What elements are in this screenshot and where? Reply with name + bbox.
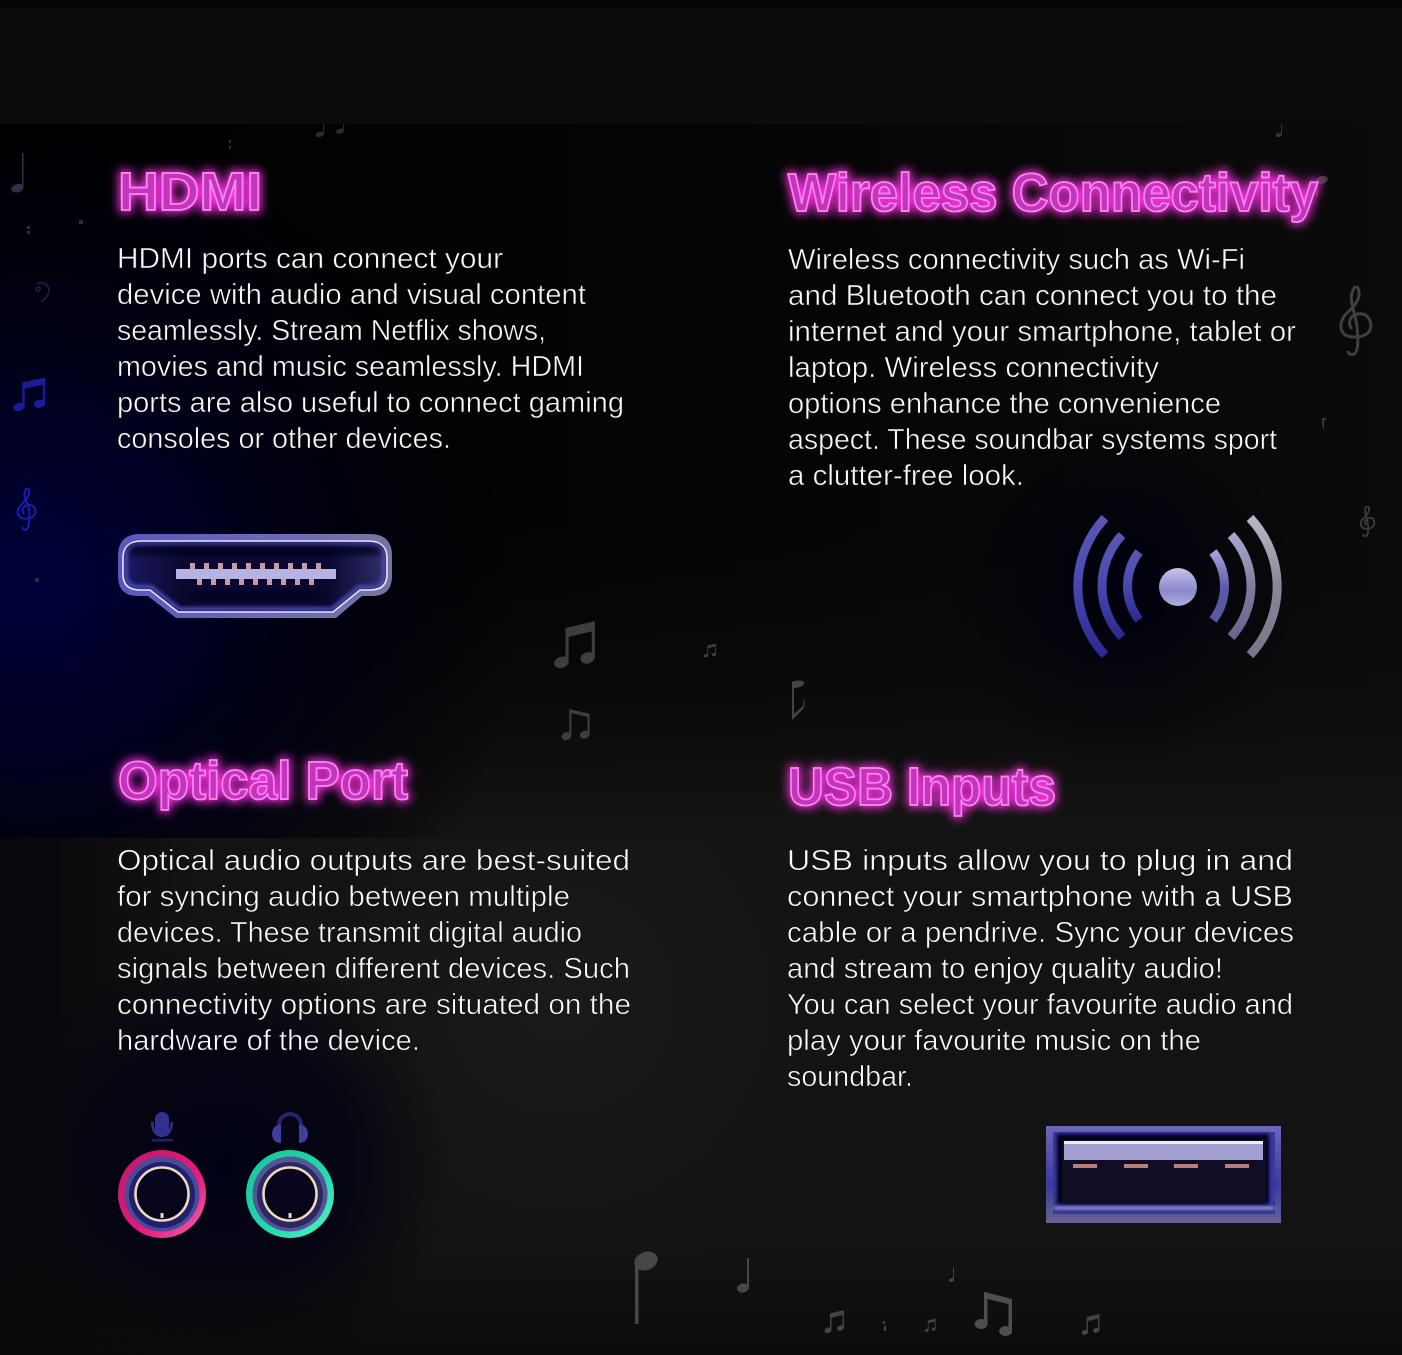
note: center flag	[792, 680, 805, 720]
text: Wireless description: options enhance the convenience	[788, 388, 1221, 420]
heading: Optical Port: Optical Port	[118, 751, 408, 811]
heading: Wireless Connectivity: Wireless Connectivity	[788, 163, 1318, 223]
note: blue beamed	[13, 378, 45, 411]
note: bottom big	[632, 1248, 660, 1324]
text: Optical description: signals between different devices. Such	[117, 953, 630, 985]
text: USB description	[787, 845, 1294, 1093]
note: center beamed medium	[562, 709, 590, 740]
heading: Wireless Connectivity: Wireless Connectivity	[788, 163, 1318, 223]
heading: Optical Port: Optical Port	[118, 751, 408, 811]
heading: HDMI: HDMI	[118, 162, 262, 222]
note: blue treble clef	[18, 488, 36, 530]
heading: USB Inputs: USB Inputs	[788, 757, 1056, 817]
text: USB description: cable or a pendrive. Sync your devices	[787, 917, 1294, 949]
note: bass clef	[36, 283, 49, 302]
icon: headphones	[272, 1114, 308, 1143]
text: Wireless description: internet and your smartphone, tablet or	[788, 316, 1296, 348]
note: bottom beamed set	[825, 1267, 1099, 1336]
text: Wireless description: laptop. Wireless connectivity	[788, 352, 1160, 384]
text: HDMI description: ports are also useful to connect gaming	[117, 387, 624, 419]
text: Optical description: connectivity options are situated on the	[117, 989, 631, 1021]
icon: pink audio jack	[118, 1150, 206, 1238]
heading: USB Inputs: USB Inputs	[788, 757, 1056, 817]
text: HDMI description: seamlessly. Stream Netflix shows,	[117, 315, 546, 347]
text: HDMI description	[117, 243, 624, 455]
text: USB description: and stream to enjoy quality audio!	[787, 953, 1223, 985]
note: right treble clef large	[1341, 286, 1371, 355]
note: quarter top left	[11, 153, 24, 192]
note: center beamed tiny	[704, 644, 716, 657]
text: Optical description: for syncing audio between multiple	[117, 881, 570, 913]
note: top right	[1276, 124, 1282, 137]
panel: HDMI	[117, 162, 624, 618]
text: Optical description: hardware of the device.	[117, 1025, 420, 1057]
note: right treble clef small	[1361, 506, 1374, 536]
note: small dots	[27, 140, 231, 582]
text: USB description: USB inputs allow you to plug in and	[787, 845, 1293, 877]
heading: HDMI: HDMI	[118, 162, 262, 222]
panel: Optical Port	[117, 751, 631, 1238]
text: USB description: play your favourite music on the	[787, 1025, 1201, 1057]
icon: HDMI port	[118, 534, 392, 618]
text: Wireless description: and Bluetooth can connect you to the	[788, 280, 1277, 312]
text: Optical description	[117, 845, 631, 1057]
note: bottom quarter	[736, 1258, 750, 1294]
icon: wireless signal	[1078, 518, 1277, 655]
icon: green audio jack	[246, 1150, 334, 1238]
text: Wireless description: a clutter-free look.	[788, 460, 1024, 492]
text: USB description: soundbar.	[787, 1061, 913, 1093]
text: Optical description: devices. These transmit digital audio	[117, 917, 582, 949]
note: center beamed large	[554, 621, 595, 668]
text: USB description: You can select your favourite audio and	[787, 989, 1293, 1021]
text: HDMI description: consoles or other devices.	[117, 423, 451, 455]
text: Wireless description: aspect. These soundbar systems sport	[788, 424, 1277, 456]
text: USB description: connect your smartphone with a USB	[787, 881, 1293, 913]
icon: USB port	[1046, 1126, 1281, 1223]
icon: microphone	[151, 1112, 173, 1142]
text: HDMI description: HDMI ports can connect your	[117, 243, 503, 275]
text: HDMI description: movies and music seamlessly. HDMI	[117, 351, 584, 383]
text: Wireless description: Wireless connectivity such as Wi-Fi	[788, 244, 1245, 276]
note: top pair	[316, 124, 344, 137]
panel: Wireless Connectivity	[788, 163, 1318, 655]
text: Optical description: Optical audio outputs are best-suited	[117, 845, 630, 877]
text: HDMI description: device with audio and visual content	[117, 279, 586, 311]
note: right flag	[1316, 176, 1328, 429]
text: Wireless description	[788, 244, 1296, 492]
panel: USB Inputs	[787, 757, 1294, 1223]
